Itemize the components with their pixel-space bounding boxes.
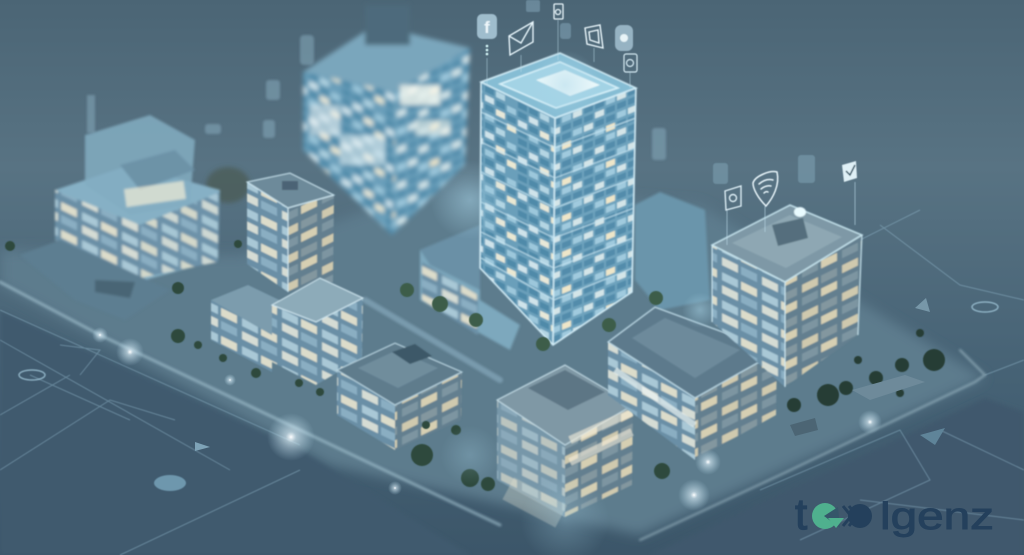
trees [5,240,945,491]
tree cluster: front [411,421,670,491]
tree cluster: centre court [400,283,663,351]
building: left centre low block [211,278,363,385]
street light glows [92,50,882,555]
tree cluster: left road [5,240,324,396]
icon: facebook [477,14,497,39]
icon: rounded app [615,25,633,51]
icon: wifi badge [753,172,778,206]
icon: check badge [842,161,857,182]
building: blurred left complex [20,115,220,320]
tree cluster: right [787,329,945,412]
floating social icons above main tower [477,0,637,72]
icon: faint panels [526,0,571,39]
building: blurred back tower [206,5,470,235]
icon: faint panels right [713,155,815,184]
right plaza details [790,375,925,436]
logo: toolgenz [795,490,994,539]
icon: camera square [725,186,741,210]
building: front block [497,365,633,528]
building: right tower [712,205,862,387]
icons: faint icons over left towers [87,35,666,160]
logo: toolgenz: t [795,490,807,539]
icon: box outline [585,25,603,48]
icon: app square [554,4,563,19]
building: back glass block behind main tower [420,192,710,350]
building: main glass tower [480,53,636,345]
building: left centre tower [247,173,334,292]
building: small front left block [337,343,462,450]
logo mark: green circle [812,503,844,529]
icon: mail envelope [509,22,533,55]
ground plane with circuit lines [0,185,1024,555]
icon: sync [624,54,637,72]
building: centre-right low block [608,307,777,460]
icon: facebook: f [484,18,490,37]
logo: toolgenz: lgenz [880,496,994,538]
road edge strips [0,282,985,540]
logo mark: chevrons and navy circle [843,504,872,528]
floating icons above right tower [487,20,857,245]
